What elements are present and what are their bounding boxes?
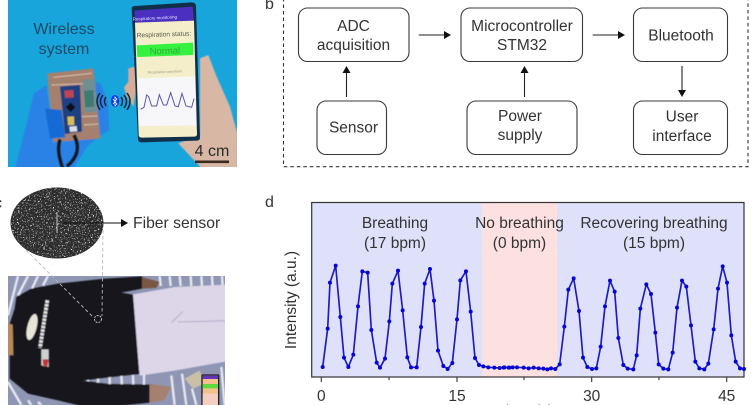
small phone — [201, 374, 219, 405]
box: Bluetooth — [634, 8, 728, 62]
y axis label: Intensity (a.u.) — [283, 251, 300, 349]
x axis tick labels: 45 — [718, 388, 735, 405]
phone screen text: Respiration status: — [137, 31, 192, 39]
phone screen text: Respiration waveform — [148, 69, 182, 75]
arrow: sensor to ADC — [342, 66, 350, 97]
box: Microcontroller STM32: Microcontroller — [471, 18, 573, 35]
panel d: breathing intensity line chart — [283, 202, 744, 405]
shirt logo — [26, 313, 38, 341]
phone screen text — [133, 14, 192, 75]
callout: fiber sensor: Fiber sensor — [133, 215, 220, 232]
gloved hand, circuit board and battery — [15, 68, 109, 168]
hand holding the phone — [124, 55, 237, 168]
box: ADC acquisition: ADC — [337, 18, 370, 35]
panel a: wireless system photo — [8, 0, 237, 168]
box: Power supply: supply — [498, 127, 543, 144]
smartphone — [132, 2, 200, 142]
axes frame — [312, 202, 744, 382]
x axis tick labels: 0 — [317, 388, 326, 405]
box: ADC acquisition — [298, 8, 409, 62]
bedding stripes — [8, 276, 225, 405]
background: no breathing region — [483, 202, 557, 377]
box: Sensor: Sensor — [329, 120, 378, 136]
x axis tick labels — [317, 388, 735, 405]
panel b: system block diagram — [284, 0, 748, 167]
box: Microcontroller STM32: STM32 — [497, 37, 547, 54]
box: ADC acquisition: acquisition — [317, 37, 390, 54]
annotation: no breathing: No breathing — [475, 215, 564, 232]
box: Microcontroller STM32 — [461, 8, 582, 62]
callout: fiber sensor — [63, 215, 220, 232]
x axis tick labels: 15 — [448, 388, 466, 405]
arrow: microcontroller to Bluetooth — [593, 31, 625, 39]
torso and sleeves — [10, 276, 150, 405]
panel c: person lying down photo — [8, 276, 226, 405]
annotation: breathing: (17 bpm) — [364, 235, 426, 252]
box: Power supply: Power — [498, 108, 542, 125]
arrow: Bluetooth to user interface — [678, 66, 686, 97]
background: breathing region — [312, 202, 483, 377]
icon: bluetooth waves — [97, 93, 130, 110]
panel c: fiber sensor magnified view — [10, 187, 104, 259]
phone screen text: Respiratory monitoring — [133, 14, 178, 22]
skin: head and hands — [8, 324, 13, 355]
heading: wireless system: Wireless — [33, 21, 95, 38]
zoom guide lines — [26, 230, 103, 322]
annotation: breathing — [362, 215, 428, 252]
heading: wireless system: system — [39, 41, 89, 58]
box: Power supply — [467, 101, 577, 154]
annotation: no breathing: (0 bpm) — [493, 235, 546, 252]
annotation: recovering breathing: Recovering breathing — [580, 215, 728, 232]
background: recovering breathing region — [557, 202, 744, 377]
star pillow — [185, 370, 205, 389]
phone screen text: Normal — [149, 45, 180, 58]
heading: wireless system — [33, 21, 95, 58]
box: User interface: interface — [652, 128, 712, 145]
annotation: recovering breathing — [580, 215, 728, 252]
data series — [323, 266, 509, 369]
panel label d: d — [265, 194, 274, 211]
arrow: power supply to microcontroller — [520, 66, 528, 97]
trousers — [132, 285, 226, 376]
scale bar: 4 cm: 4 cm — [195, 143, 229, 160]
annotation: recovering breathing: (15 bpm) — [623, 235, 685, 252]
box: User interface: User — [666, 108, 698, 126]
arrow: ADC to microcontroller — [419, 31, 451, 39]
annotation: no breathing — [475, 215, 564, 252]
box: Sensor — [317, 101, 386, 154]
box: Bluetooth: Bluetooth — [648, 28, 714, 44]
annotation: breathing: Breathing — [362, 215, 428, 232]
box: User interface — [634, 101, 728, 154]
x axis tick labels: 30 — [583, 388, 601, 405]
